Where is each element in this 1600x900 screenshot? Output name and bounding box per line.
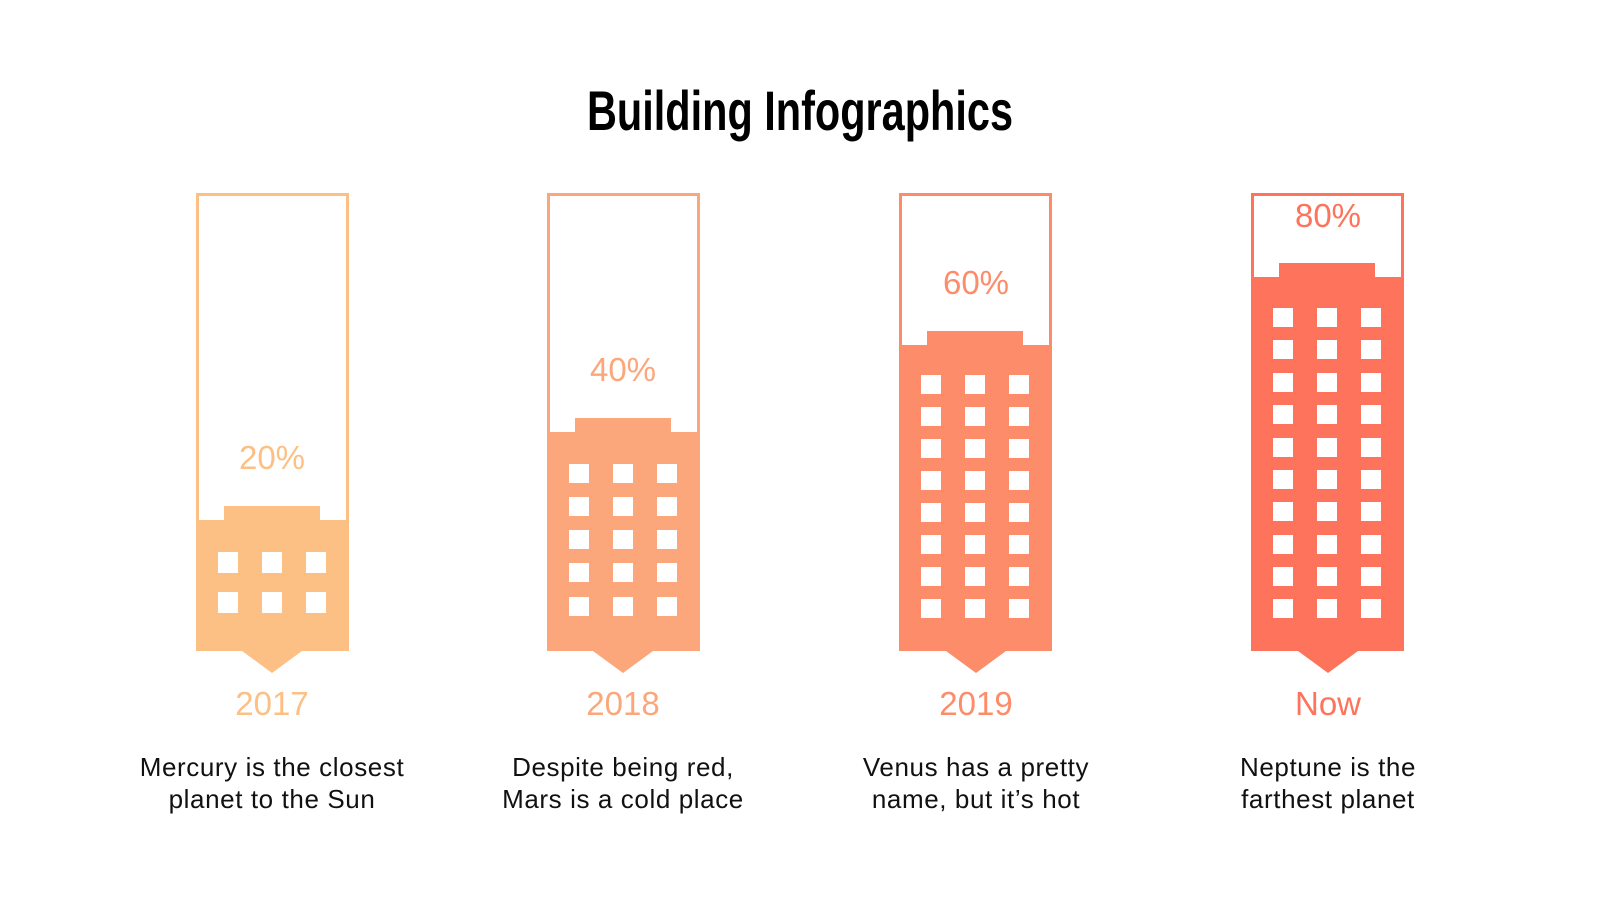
text 2017: Mercury is the closest	[140, 752, 404, 782]
building 2018	[547, 194, 700, 673]
building 2019	[899, 194, 1052, 673]
year now: Now	[1295, 685, 1361, 722]
text now: farthest planet	[1241, 784, 1415, 814]
building 2019: 60%	[943, 264, 1009, 301]
text 2019: Venus has a pretty	[863, 752, 1089, 782]
label 20%: 20%	[239, 439, 305, 476]
building 2017	[196, 194, 349, 673]
text 2017: planet to the Sun	[169, 784, 375, 814]
building now	[1251, 194, 1404, 673]
year 2019: 2019	[939, 685, 1013, 722]
building now: 80%	[1295, 197, 1361, 234]
title: Building Infographics	[587, 79, 1013, 142]
building 2018: 40%	[590, 351, 656, 388]
text 2018: Mars is a cold place	[502, 784, 744, 814]
outline 2017	[198, 194, 348, 650]
building body 2017	[196, 506, 349, 673]
text now: Neptune is the	[1240, 752, 1416, 782]
text 2019: name, but it’s hot	[872, 784, 1080, 814]
year 2018: 2018	[586, 685, 660, 722]
text 2018: Despite being red,	[512, 752, 734, 782]
year 2017: 2017	[235, 685, 309, 722]
